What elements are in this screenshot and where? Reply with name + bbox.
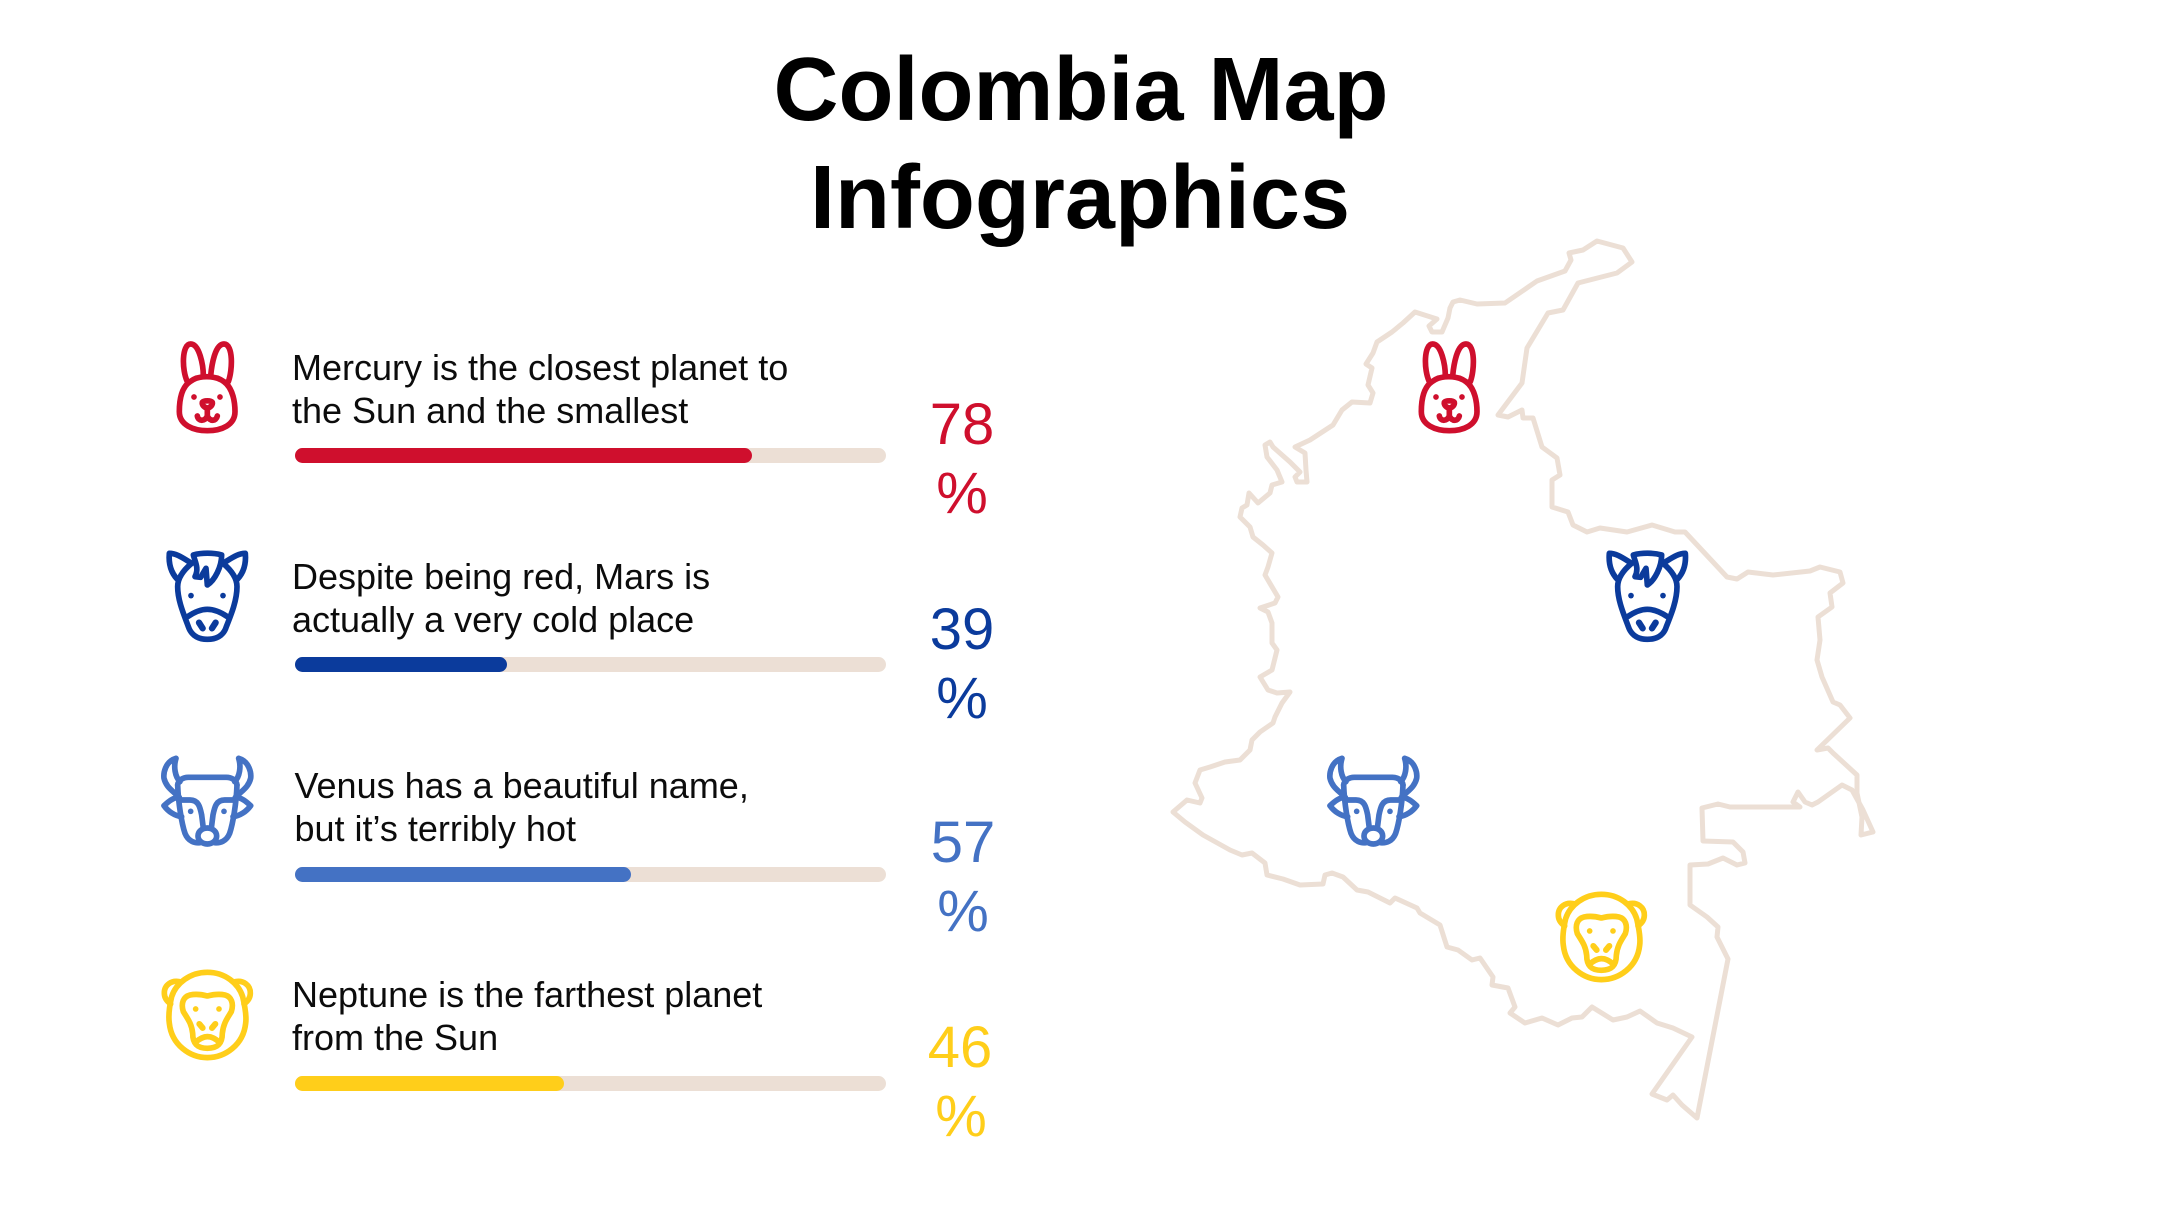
text: Mercury: Mercury is the closest planet to [292,347,788,388]
row 2: Mars [169,553,994,731]
icon: rabbit [179,344,235,431]
value: 57% [931,810,995,944]
map icon: rabbit [1421,344,1477,431]
text: Mars [292,556,710,640]
text: Neptune: Neptune is the farthest planet [292,974,762,1015]
map icon: bull [1330,758,1417,844]
bar: 46% [295,1076,886,1091]
text: Mars: Despite being red, Mars is [292,556,710,597]
text: Neptune [292,974,762,1058]
value: 57%: % [937,879,989,944]
title [773,40,1389,248]
row 1: Mercury [179,344,994,526]
title: Infographics [810,148,1350,248]
text: Venus: but it’s terribly hot [294,808,576,849]
row 4: Neptune [164,972,992,1149]
text: Mercury [292,347,788,431]
value: 46%: % [935,1084,987,1149]
icon: monkey [164,972,250,1058]
map icon: horse [1609,553,1685,639]
icon: horse [169,553,245,639]
bar: 78% [295,448,886,463]
value: 46%: 46 [928,1015,992,1080]
map: Colombia outline [1173,241,1873,1118]
map icon: monkey [1558,894,1644,980]
bar: 57% [295,867,886,882]
value: 78% [930,392,994,526]
bar: 39% [295,657,886,672]
icon: bull [164,758,251,844]
text: Mercury: the Sun and the smallest [292,390,688,431]
value: 78%: % [936,461,988,526]
value: 39%: % [936,666,988,731]
value: 78%: 78 [930,392,994,457]
value: 39% [930,597,994,731]
value: 57%: 57 [931,810,995,875]
value: 39%: 39 [930,597,994,662]
value: 46% [928,1015,992,1149]
row 3: Venus [164,758,995,944]
text: Venus [294,765,749,849]
title: Colombia Map [773,40,1389,140]
text: Mars: actually a very cold place [292,599,694,640]
text: Venus: Venus has a beautiful name, [294,765,749,806]
text: Neptune: from the Sun [292,1017,498,1058]
